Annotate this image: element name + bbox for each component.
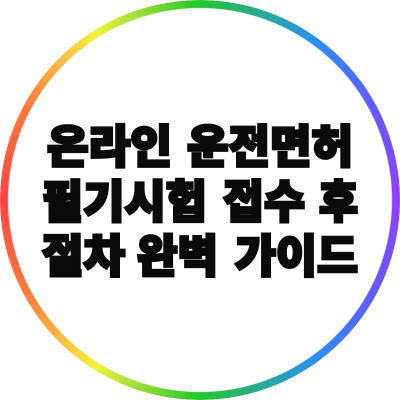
title line 3: 절차 [42,231,125,282]
title line 3: 완벽 [137,231,218,282]
title line 2 [42,176,358,228]
title line 2: 필기시험 [42,176,207,228]
title line 1: 온라인 [47,122,172,172]
title line 1 [47,122,353,172]
title line 3 [42,231,358,282]
title line 2: 접수 [223,176,305,228]
title line 2: 후 [319,176,358,228]
title line 1: 운전면허 [187,122,353,172]
title line 3: 가이드 [235,231,358,282]
